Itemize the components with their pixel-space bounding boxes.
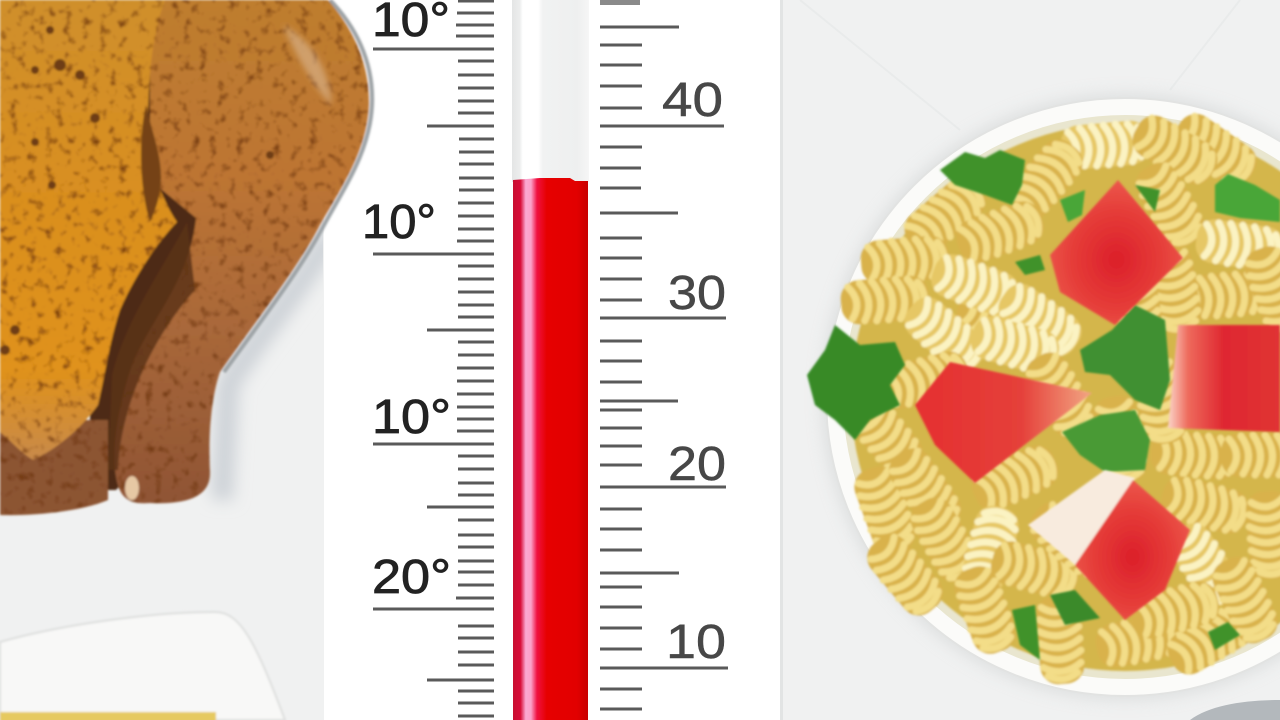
basil leaves xyxy=(807,150,1280,660)
textured chicken skin xyxy=(0,0,369,515)
skin speckles xyxy=(0,26,274,355)
roast chicken xyxy=(0,0,372,515)
pasta salad bowl xyxy=(807,94,1280,700)
rim shadow xyxy=(224,0,372,372)
right scale labels: 10 xyxy=(666,616,726,669)
thermometer panel xyxy=(324,0,783,720)
fusilli pasta xyxy=(839,107,1280,686)
breast-thigh fold xyxy=(141,105,161,222)
right scale labels: 40 xyxy=(662,74,723,127)
right scale labels xyxy=(662,74,726,669)
left scale labels: 10° xyxy=(362,196,436,249)
butter dish xyxy=(0,612,285,720)
lower leg xyxy=(0,420,108,515)
right scale labels: 30 xyxy=(668,267,726,320)
chicken ground shadow xyxy=(222,235,330,500)
left scale labels xyxy=(362,0,451,604)
crease shadow xyxy=(108,222,195,470)
thigh and drumstick xyxy=(114,0,369,503)
breast xyxy=(0,0,177,460)
right scale ticks xyxy=(600,0,728,709)
butter xyxy=(0,712,216,720)
drumstick pale tip xyxy=(125,476,139,500)
watermelon pieces xyxy=(915,180,1280,620)
right scale labels: 20 xyxy=(668,438,726,491)
left scale labels: 10° xyxy=(372,391,451,444)
bowl xyxy=(826,98,1280,696)
thigh highlight xyxy=(283,25,332,105)
thermometer tube xyxy=(512,0,589,720)
left scale ticks xyxy=(373,1,494,716)
mercury column xyxy=(513,178,588,720)
dark underside xyxy=(90,0,200,490)
left scale labels: 20° xyxy=(372,551,451,604)
grey dish corner xyxy=(1190,700,1280,720)
